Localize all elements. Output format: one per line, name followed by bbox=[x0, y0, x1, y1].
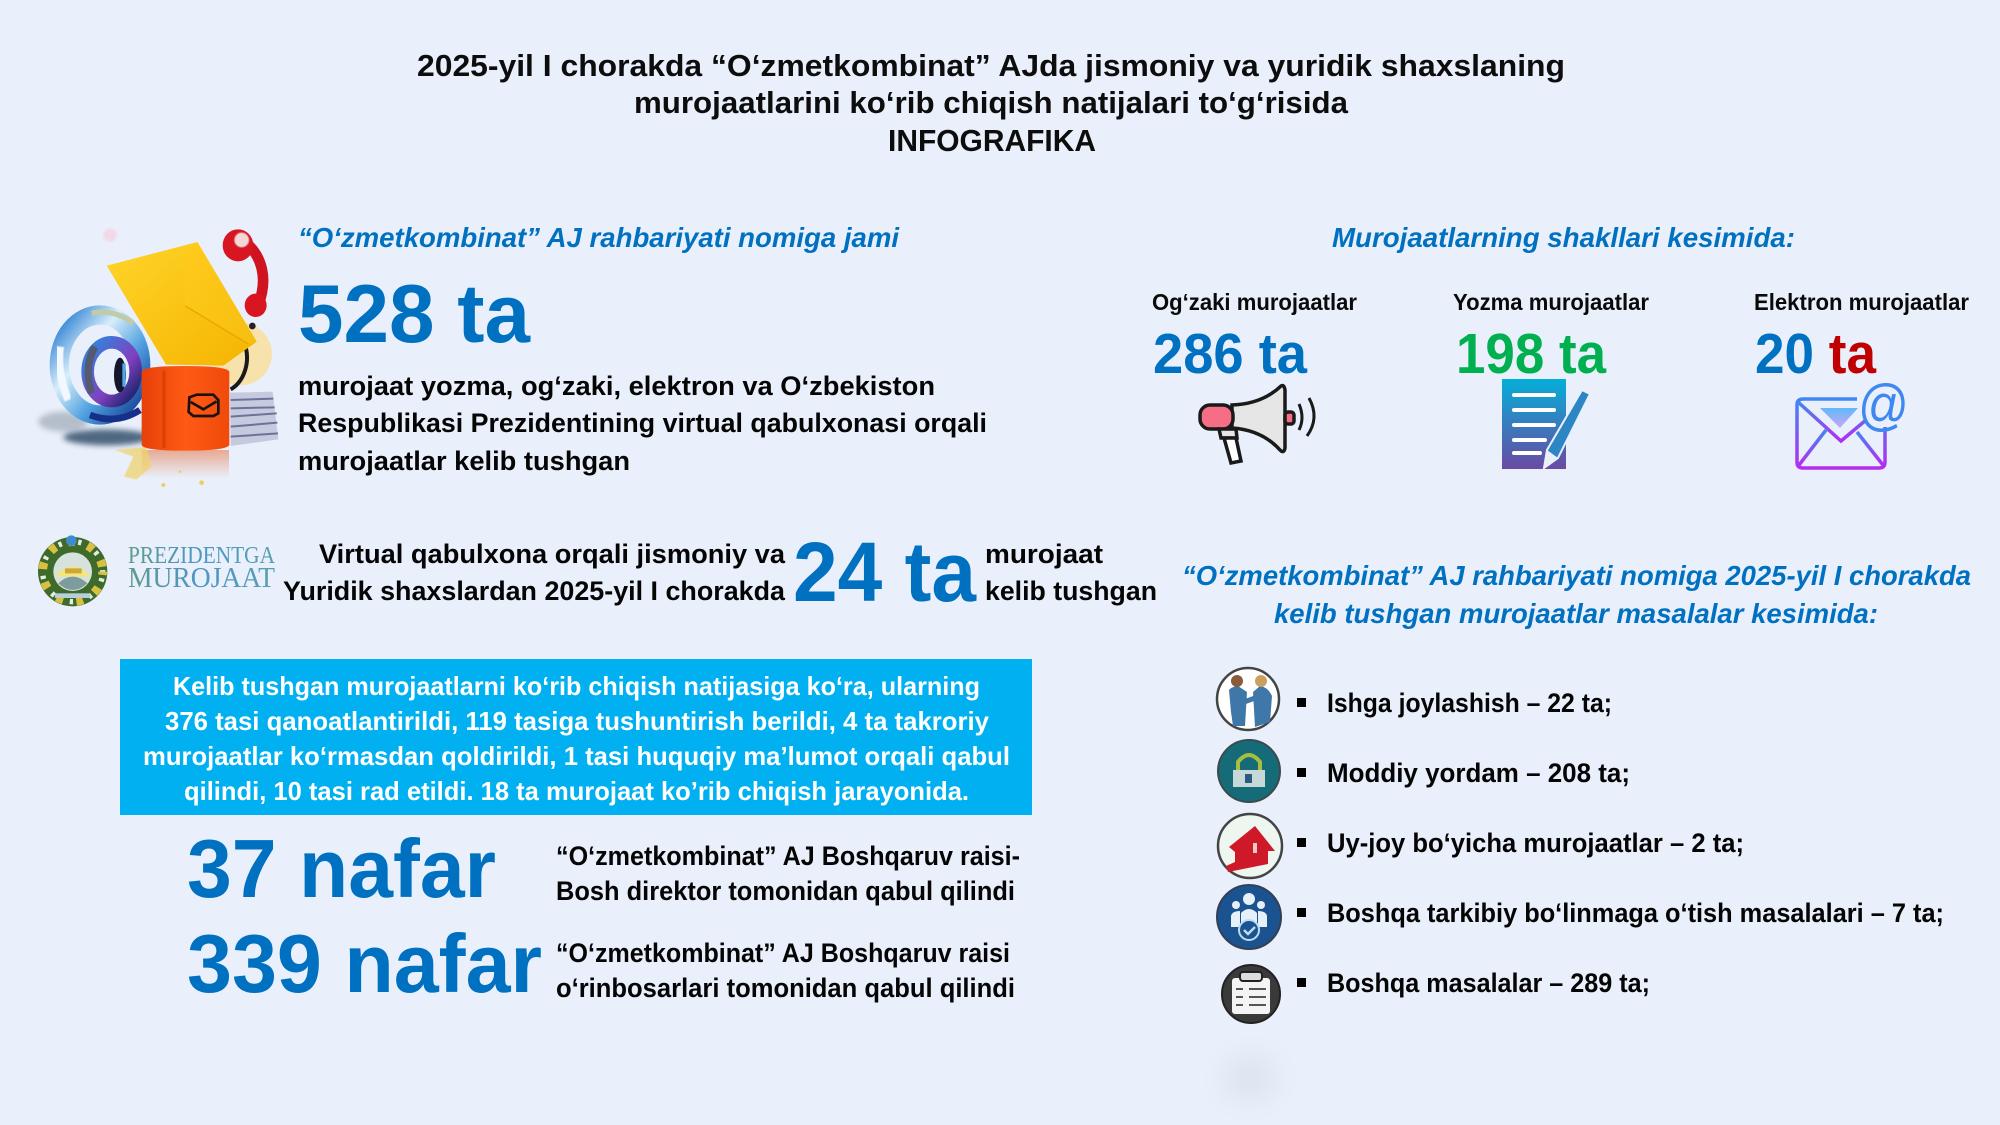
stat: written appeals: Yozma murojaatlar bbox=[1453, 289, 1649, 315]
list item: financial aid: Moddiy yordam – 208 ta; bbox=[1327, 758, 1630, 788]
logo: Prezidentga Murojaat bbox=[128, 543, 276, 594]
stat: written appeals bbox=[1453, 289, 1649, 469]
icon: house bbox=[1218, 814, 1282, 878]
list item: employment: Ishga joylashish – 22 ta; bbox=[1327, 688, 1612, 718]
callout: review results: 376 tasi qanoatlantirildi, 119 tasiga tushuntirish berildi, 4 ta takroriy bbox=[165, 706, 990, 736]
stat: 37 received by director: Bosh direktor tomonidan qabul qilindi bbox=[556, 876, 1015, 906]
box reflection and paint splash bbox=[115, 447, 229, 487]
text: virtual reception bbox=[283, 539, 786, 606]
stat: 339 received by deputies: o‘rinbosarlari tomonidan qabul qilindi bbox=[556, 973, 1015, 1003]
text: virtual reception: Yuridik shaxslardan 2025-yil I chorakda bbox=[283, 576, 786, 606]
callout: review results: qilindi, 10 tasi rad etildi. 18 ta murojaat ko’rib chiqish jarayonida. bbox=[184, 776, 969, 806]
title: INFOGRAFIKA bbox=[888, 123, 1096, 158]
text: appeals received: murojaat bbox=[985, 539, 1103, 569]
icon: document and pen bbox=[1502, 379, 1590, 469]
icon: envelope with at sign bbox=[1797, 373, 1909, 468]
stat: written appeals: 198 ta bbox=[1456, 322, 1607, 386]
text: appeals received: kelib tushgan bbox=[985, 576, 1157, 606]
heading: appeals by topic bbox=[1182, 560, 1971, 629]
icon: financial aid bbox=[1218, 740, 1280, 802]
list item: housing: Uy-joy bo‘yicha murojaatlar – 2 ta; bbox=[1327, 828, 1744, 858]
stack of papers bbox=[230, 392, 278, 446]
callout: review results: Kelib tushgan murojaatlarni ko‘rib chiqish natijasiga ko‘ra, ularning bbox=[173, 671, 980, 701]
text: total appeals description: Respublikasi Prezidentining virtual qabulxonasi orqali bbox=[298, 408, 987, 438]
stat: 37 received by director bbox=[187, 822, 1020, 915]
title: murojaatlarini ko‘rib chiqish natijalari to‘g‘risida bbox=[634, 85, 1349, 120]
icon: clipboard bbox=[1222, 965, 1280, 1023]
@ sign bbox=[59, 312, 141, 419]
text: virtual reception: Virtual qabulxona orqali jismoniy va bbox=[319, 539, 786, 569]
text: total appeals description bbox=[298, 371, 987, 476]
stat: oral appeals bbox=[1152, 289, 1357, 463]
title: 2025-yil I chorakda “O‘zmetkombinat” AJda jismoniy va yuridik shaxslaning bbox=[417, 48, 1565, 83]
callout: review results: murojaatlar ko‘rmasdan qoldirildi, 1 tasi huquqiy ma’lumot orqali qabul bbox=[143, 741, 1010, 771]
icon: handshake bbox=[1217, 668, 1279, 730]
stat: 339 received by deputies: 339 nafar bbox=[187, 917, 542, 1010]
stat: oral appeals: 286 ta bbox=[1153, 322, 1308, 386]
icon: megaphone bbox=[1200, 386, 1314, 463]
list item: other: Boshqa masalalar – 289 ta; bbox=[1327, 968, 1650, 998]
number: 24 ta: 24 ta bbox=[793, 525, 977, 619]
red telephone bbox=[223, 229, 267, 329]
logo: Prezidentga Murojaat: MUROJAAT bbox=[128, 562, 275, 594]
stat: electronic appeals bbox=[1754, 289, 1969, 468]
stat: electronic appeals: 20 ta bbox=[1755, 322, 1877, 386]
icon: envelope with at sign: @ bbox=[1858, 373, 1909, 437]
stat: oral appeals: Og‘zaki murojaatlar bbox=[1152, 289, 1357, 315]
stat: 339 received by deputies: “O‘zmetkombinat” AJ Boshqaruv raisi bbox=[556, 938, 1010, 968]
list item: transfer: Boshqa tarkibiy bo‘linmaga o‘tish masalalari – 7 ta; bbox=[1327, 898, 1944, 928]
heading: total appeals: “O‘zmetkombinat” AJ rahbariyati nomiga jami bbox=[298, 222, 900, 253]
stat: 339 received by deputies bbox=[187, 917, 1015, 1010]
heading: appeals by topic: kelib tushgan murojaatlar masalalar kesimida: bbox=[1274, 598, 1878, 629]
logo: state emblem bbox=[38, 535, 107, 606]
stat: 37 received by director: “O‘zmetkombinat” AJ Boshqaruv raisi- bbox=[556, 841, 1020, 871]
text: total appeals description: murojaatlar kelib tushgan bbox=[298, 446, 630, 476]
callout: review results bbox=[120, 659, 1032, 815]
icon: team with check mark bbox=[1217, 885, 1281, 949]
illustration: envelope, phone, @ sign and mailbox bbox=[38, 228, 278, 487]
text: total appeals description: murojaat yozma, og‘zaki, elektron va O‘zbekiston bbox=[298, 371, 935, 401]
orange mailbox bbox=[142, 366, 229, 451]
heading: appeal forms: Murojaatlarning shakllari kesimida: bbox=[1332, 222, 1795, 253]
number: 528 ta: 528 ta bbox=[298, 267, 531, 360]
yellow envelope bbox=[107, 242, 257, 366]
stat: 37 received by director: 37 nafar bbox=[187, 822, 496, 915]
heading: appeals by topic: “O‘zmetkombinat” AJ rahbariyati nomiga 2025-yil I chorakda bbox=[1182, 560, 1971, 591]
logo: Prezidentga Murojaat: PREZIDENTGA bbox=[128, 543, 276, 569]
text: appeals received bbox=[985, 539, 1157, 606]
title bbox=[417, 48, 1565, 158]
stat: electronic appeals: Elektron murojaatlar bbox=[1754, 289, 1969, 315]
